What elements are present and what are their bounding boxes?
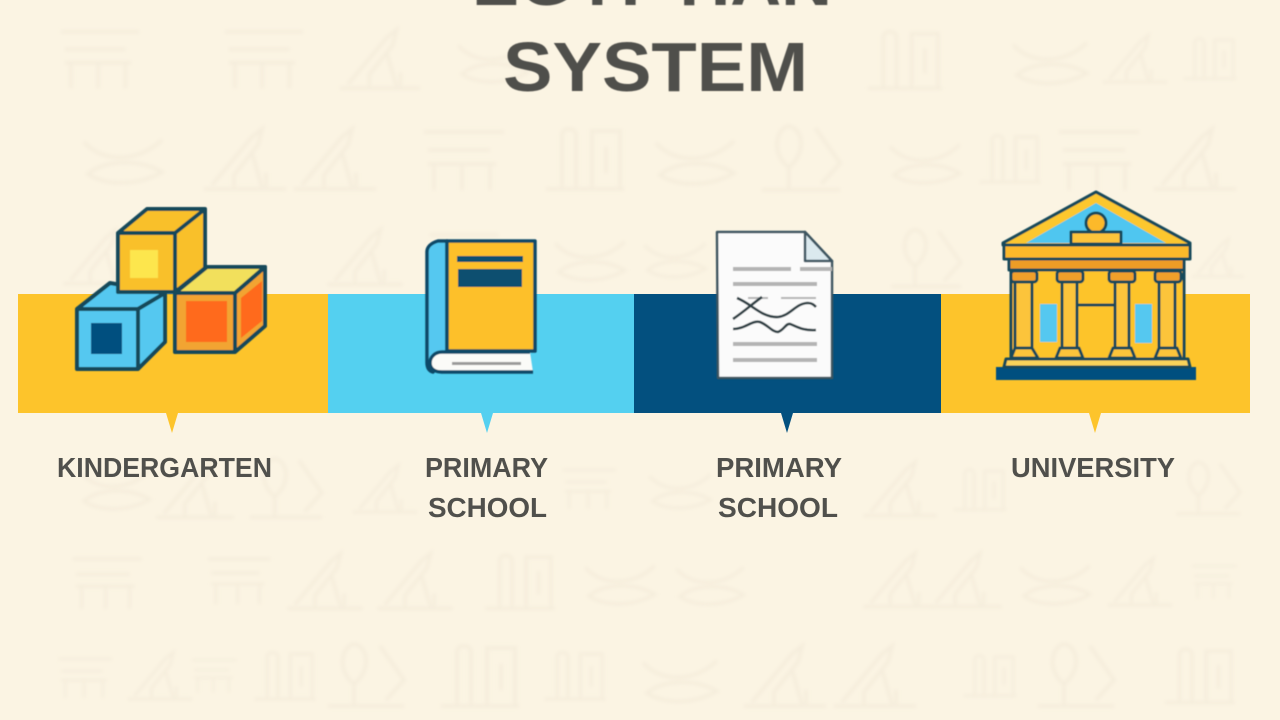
icon: book <box>427 241 535 372</box>
label: primary school 1: SCHOOL <box>428 492 547 523</box>
steps <box>1004 359 1190 367</box>
label: university: UNIVERSITY <box>1011 452 1175 483</box>
title <box>472 0 832 106</box>
segment: primary school 1 <box>328 294 634 433</box>
segment: university <box>941 294 1250 433</box>
icon: university building <box>996 192 1196 380</box>
navy base <box>996 367 1196 380</box>
segment: kindergarten <box>18 294 328 433</box>
text lines <box>733 267 832 362</box>
walls <box>1011 268 1184 359</box>
cover bars <box>457 256 523 262</box>
windows <box>1040 304 1057 342</box>
label: primary school 1 <box>425 452 548 523</box>
blue block <box>77 283 165 369</box>
column bases <box>1011 348 1181 358</box>
segment: primary school 2 <box>634 294 941 433</box>
label: primary school 2: PRIMARY <box>716 452 842 483</box>
door <box>1077 304 1115 306</box>
cover <box>447 241 535 351</box>
pages <box>430 352 533 372</box>
icon: document <box>717 232 832 378</box>
label: primary school 1: PRIMARY <box>425 452 548 483</box>
label: primary school 2 <box>716 452 842 523</box>
yellow block <box>118 209 205 292</box>
columns <box>1015 282 1175 348</box>
label: primary school 2: SCHOOL <box>718 492 838 523</box>
pediment <box>1003 192 1190 245</box>
title: SYSTEM <box>503 28 808 106</box>
orange block <box>175 267 265 352</box>
capitals <box>1011 271 1181 282</box>
timeline band <box>18 294 1250 433</box>
upper entablature <box>1004 245 1190 259</box>
scribbles <box>733 297 816 332</box>
page <box>717 232 832 378</box>
icon: building blocks <box>77 209 265 369</box>
lower entablature <box>1009 259 1184 270</box>
label: kindergarten: KINDERGARTEN <box>57 452 272 483</box>
page fold <box>805 232 832 261</box>
spine <box>427 241 447 372</box>
